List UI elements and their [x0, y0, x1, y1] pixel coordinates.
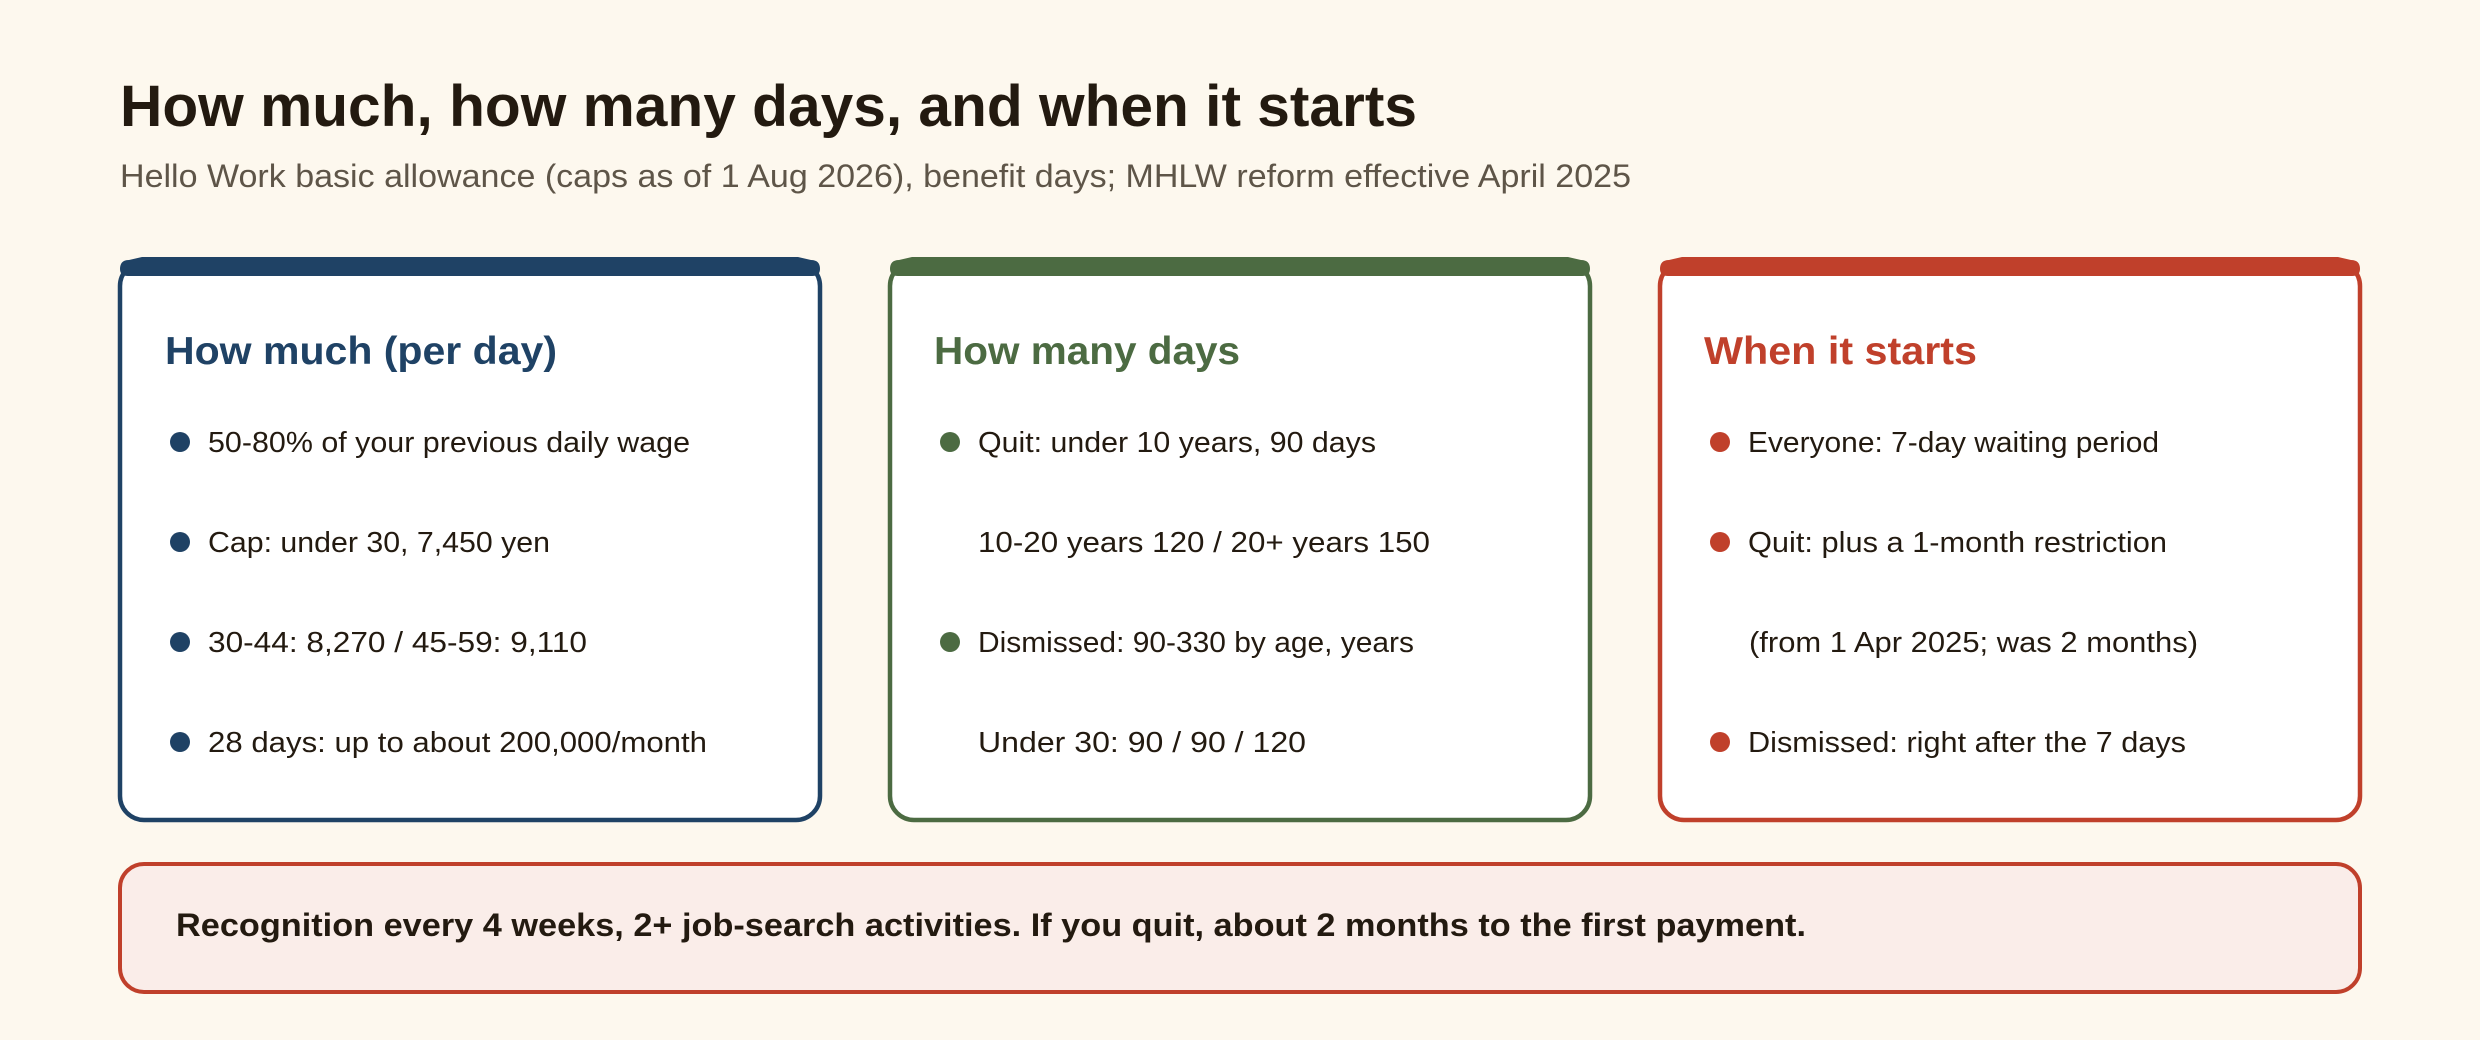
callout — [120, 864, 2360, 992]
bullet 1: Everyone: 7-day waiting period — [1748, 427, 2159, 459]
heading: When it starts — [1704, 330, 1977, 373]
line 2: 10-20 years 120 / 20+ years 150 — [978, 527, 1430, 559]
bullet 2: Cap: under 30, 7,450 yen — [208, 527, 550, 559]
panel: how much — [120, 257, 820, 820]
bullet 3: 30-44: 8,270 / 45-59: 9,110 — [208, 627, 587, 659]
bullet 2: Dismissed: 90-330 by age, years — [978, 627, 1414, 659]
panel: how many days — [890, 257, 1590, 820]
bullet 2: Quit: plus a 1-month restriction — [1748, 527, 2167, 559]
line 4: Under 30: 90 / 90 / 120 — [978, 727, 1306, 759]
heading: How much (per day) — [165, 330, 557, 373]
bullet 4: 28 days: up to about 200,000/month — [208, 727, 707, 759]
title: How much, how many days, and when it starts — [120, 74, 1417, 139]
bullet 1: 50-80% of your previous daily wage — [208, 427, 690, 459]
panel: when it starts — [1660, 257, 2360, 820]
bullet 1: Quit: under 10 years, 90 days — [978, 427, 1376, 459]
subtitle: Hello Work basic allowance (caps as of 1 Aug 2026), benefit days; MHLW reform effective April 2025 — [120, 158, 1631, 194]
callout: Recognition every 4 weeks, 2+ job-search activities. If you quit, about 2 months to the first payment. — [176, 907, 1806, 943]
bullet 3: Dismissed: right after the 7 days — [1748, 727, 2186, 759]
heading: How many days — [934, 330, 1240, 373]
line 3: (from 1 Apr 2025; was 2 months) — [1749, 627, 2198, 659]
